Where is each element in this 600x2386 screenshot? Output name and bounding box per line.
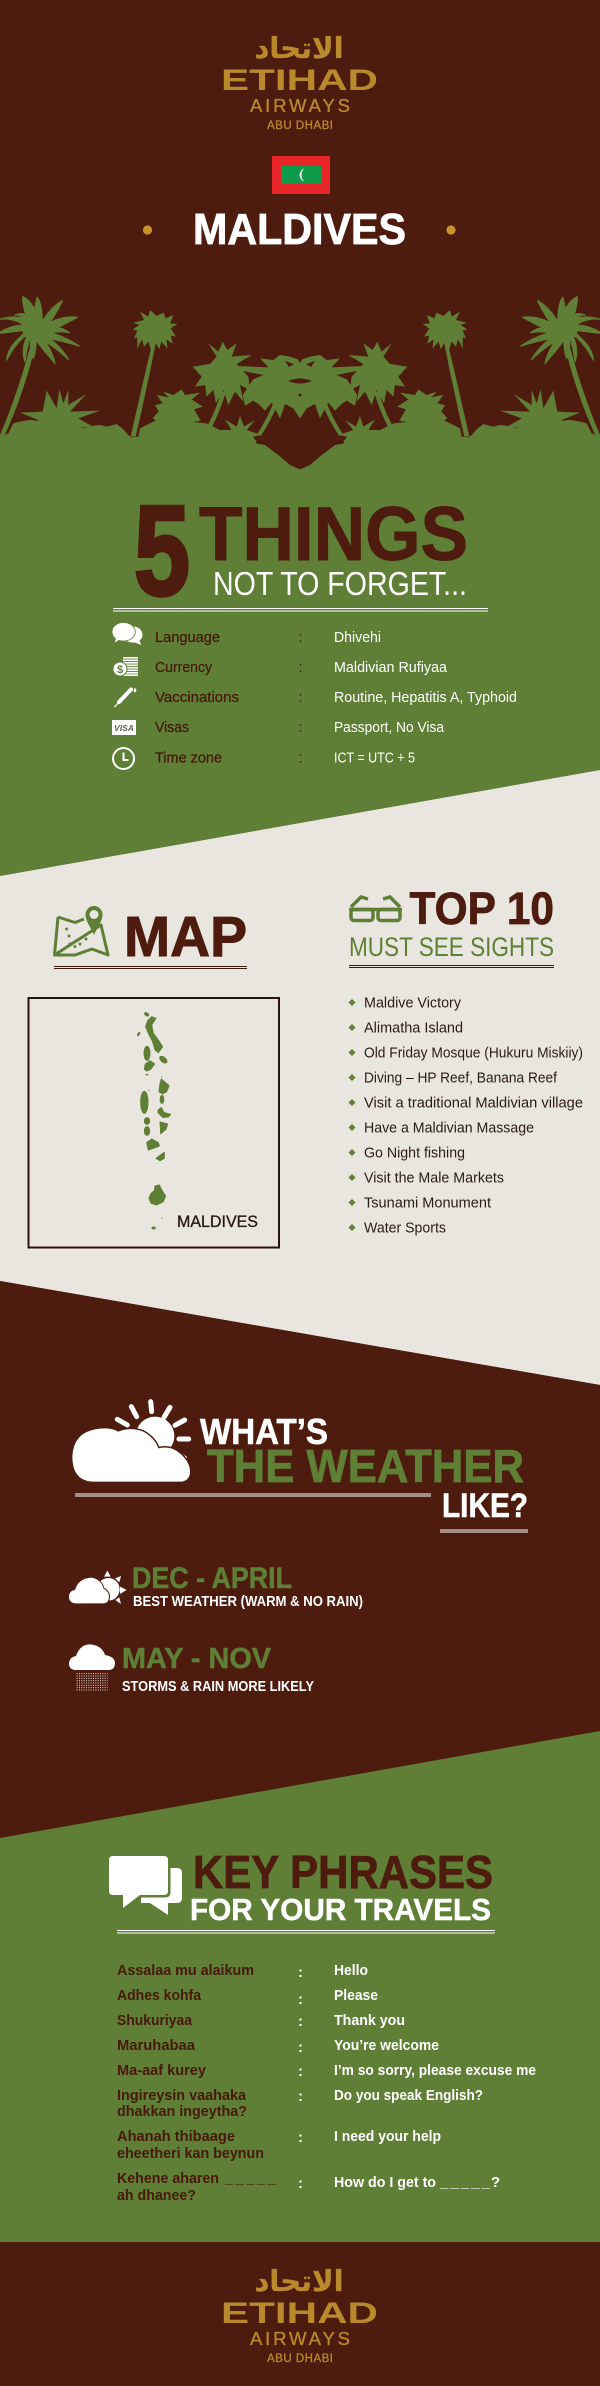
subheading: must see sights: MUST SEE SIGHTS [349, 932, 554, 962]
colon: : [298, 660, 303, 676]
row label time zone: Time zone [155, 750, 222, 766]
value currency: Maldivian Rufiyaa [334, 660, 448, 676]
english translations: Do you speak English? [334, 2087, 483, 2104]
list: top 10 sights: Old Friday Mosque (Hukuru Miskiiy) [364, 1044, 583, 1062]
list: top 10 sights: Have a Maldivian Massage [364, 1120, 534, 1136]
english translations: I need your help [334, 2128, 441, 2145]
icon: visa card: VISA [114, 723, 134, 733]
logo: Etihad Airways footer: ABU DHABI [267, 2353, 333, 2365]
colon: : [298, 630, 303, 646]
local phrases: Ahanah thibaage [117, 2128, 235, 2145]
panel: green key phrases background [0, 1731, 600, 2242]
local phrases: Adhes kohfa [117, 1987, 202, 2004]
heading: what's: WHAT’S [200, 1411, 328, 1452]
value time zone: ICT = UTC + 5 [334, 750, 415, 766]
local phrases [117, 1962, 277, 2204]
icon: small cloud and sun [69, 1571, 127, 1604]
title: Maldives: MALDIVES [193, 205, 406, 254]
english translations: Please [334, 1987, 378, 2004]
heading: 5 things [134, 480, 468, 623]
map: Maldives atolls [137, 1012, 171, 1229]
icon: currency: $ [117, 664, 123, 676]
local phrases: Ma-aaf kurey [117, 2062, 207, 2079]
colons: : [298, 2039, 303, 2056]
panel: brown footer background [0, 2242, 600, 2386]
season heading: may - nov: MAY - NOV [122, 1643, 272, 1675]
list: top 10 sights [348, 994, 583, 1236]
heading: map: MAP [124, 905, 247, 969]
local phrases: Kehene aharen [117, 2170, 219, 2187]
illustration: centre gaps between palms [285, 358, 315, 396]
colons [298, 1964, 303, 2192]
palm F [153, 389, 203, 427]
logo: Etihad Airways footer: AIRWAYS [250, 2328, 350, 2349]
island ground [0, 418, 300, 513]
sun rays [117, 1402, 189, 1457]
panel: brown header background [0, 0, 600, 800]
colons: : [298, 2175, 303, 2192]
row label language: Language [155, 630, 220, 646]
logo: Etihad Airways footer: الاتحاد [254, 2264, 344, 2298]
value vaccinations: Routine, Hepatitis A, Typhoid [334, 690, 517, 706]
english translations [334, 1962, 536, 2191]
colon: : [298, 720, 303, 736]
big numeral 5: 5 [134, 480, 190, 623]
colons: : [298, 2013, 303, 2030]
colons: : [298, 1964, 303, 1981]
local phrases: eheetheri kan beynun [117, 2145, 264, 2162]
decorative gold dot left [143, 225, 152, 235]
palm A crown [22, 317, 50, 341]
season heading: dec - april: DEC - APRIL [132, 1562, 292, 1595]
palm C [193, 342, 252, 427]
heading: top 10: TOP 10 [410, 883, 554, 934]
colon: : [298, 690, 303, 706]
table: phrases [117, 1962, 536, 2204]
english translations: ? [491, 2174, 500, 2191]
table: five things rows [112, 622, 517, 769]
heading: like?: LIKE? [442, 1487, 528, 1525]
icon: syringe [114, 688, 136, 707]
cloud [72, 1428, 190, 1482]
icon: speech bubbles [112, 622, 143, 646]
season note: storms: STORMS & RAIN MORE LIKELY [122, 1679, 314, 1695]
icon: Maldives flag [272, 156, 330, 194]
row label currency: Currency [155, 660, 213, 676]
list: top 10 sights: Water Sports [364, 1220, 446, 1236]
sun [136, 1417, 174, 1455]
palm G [220, 416, 262, 443]
palm D [235, 355, 300, 436]
icon: cloud and sun [72, 1402, 190, 1482]
list: top 10 sights: Alimatha Island [364, 1020, 463, 1036]
logo: Etihad Airways header: AIRWAYS [250, 95, 350, 116]
local phrases: _____ [224, 2170, 277, 2187]
list: top 10 sights: Diving – HP Reef, Banana Reef [364, 1070, 558, 1086]
list: top 10 sights: Visit the Male Markets [364, 1170, 504, 1186]
icon: glasses [349, 897, 402, 920]
colons: : [298, 2129, 303, 2146]
colons: : [298, 2063, 303, 2080]
map frame [28, 998, 279, 1248]
panel: brown weather background [0, 1281, 600, 1838]
list: top 10 sights: Go Night fishing [364, 1144, 465, 1162]
list: top 10 sights: Tsunami Monument [364, 1194, 492, 1212]
rain dots [77, 1674, 108, 1690]
english translations: I’m so sorry, please excuse me [334, 2062, 536, 2079]
english translations: You’re welcome [334, 2037, 439, 2054]
icon: visa card [112, 720, 136, 735]
logo: Etihad Airways header: الاتحاد [254, 31, 344, 65]
logo: Etihad Airways header: ABU DHABI [267, 120, 333, 132]
logo: Etihad Airways footer [221, 2264, 378, 2365]
illustration: palm tree silhouette right (mirrored) [300, 297, 600, 513]
subheading: not to forget: NOT TO FORGET... [213, 565, 467, 602]
row label visas: Visas [155, 720, 189, 736]
list: top 10 sights: Visit a traditional Maldivian village [364, 1094, 583, 1112]
english translations: Thank you [334, 2012, 405, 2029]
icon: chat bubbles [107, 1854, 182, 1915]
local phrases: Maruhabaa [117, 2037, 196, 2054]
palm A [0, 297, 79, 437]
palm B [131, 310, 177, 437]
english translations: How do I get to [334, 2174, 436, 2191]
local phrases: ah dhanee? [117, 2187, 196, 2204]
colons: : [298, 1991, 303, 2008]
palm E [20, 389, 100, 428]
local phrases: Assalaa mu alaikum [117, 1962, 254, 1979]
icon: rain cloud [69, 1644, 115, 1690]
local phrases: Ingireysin vaahaka [117, 2087, 247, 2104]
colon: : [298, 750, 303, 766]
heading: key phrases: KEY PHRASES [193, 1846, 493, 1898]
palm B crown [140, 316, 170, 342]
row label vaccinations: Vaccinations [155, 690, 239, 706]
logo: Etihad Airways footer: ETIHAD [221, 2297, 378, 2330]
local phrases: dhakkan ingeytha? [117, 2103, 247, 2120]
illustration: palm tree silhouette left [0, 297, 300, 513]
panel: beige map and sights background [0, 770, 600, 1385]
bullets [348, 999, 356, 1231]
logo: Etihad Airways header: ETIHAD [221, 64, 378, 97]
heading: for your travels: FOR YOUR TRAVELS [190, 1892, 491, 1927]
word things: THINGS [199, 492, 468, 577]
season note: best weather: BEST WEATHER (WARM & NO RAIN) [133, 1594, 363, 1610]
icon: currency [113, 657, 138, 676]
icon: folded map with pin [54, 906, 108, 955]
map label: MALDIVES [177, 1212, 258, 1231]
decorative gold dot right [446, 225, 456, 235]
list: top 10 sights: Maldive Victory [364, 994, 461, 1012]
panel: green 5 things background [0, 472, 600, 876]
heading: the weather: THE WEATHER [207, 1440, 524, 1492]
english translations: Hello [334, 1962, 368, 1979]
english translations: _____ [439, 2174, 491, 2191]
colons: : [298, 2088, 303, 2105]
value visas: Passport, No Visa [334, 720, 445, 736]
palm C crown [206, 359, 239, 387]
value language: Dhivehi [334, 630, 381, 646]
icon: clock [113, 748, 134, 769]
logo: Etihad Airways header [221, 31, 378, 132]
local phrases: Shukuriyaa [117, 2012, 193, 2029]
